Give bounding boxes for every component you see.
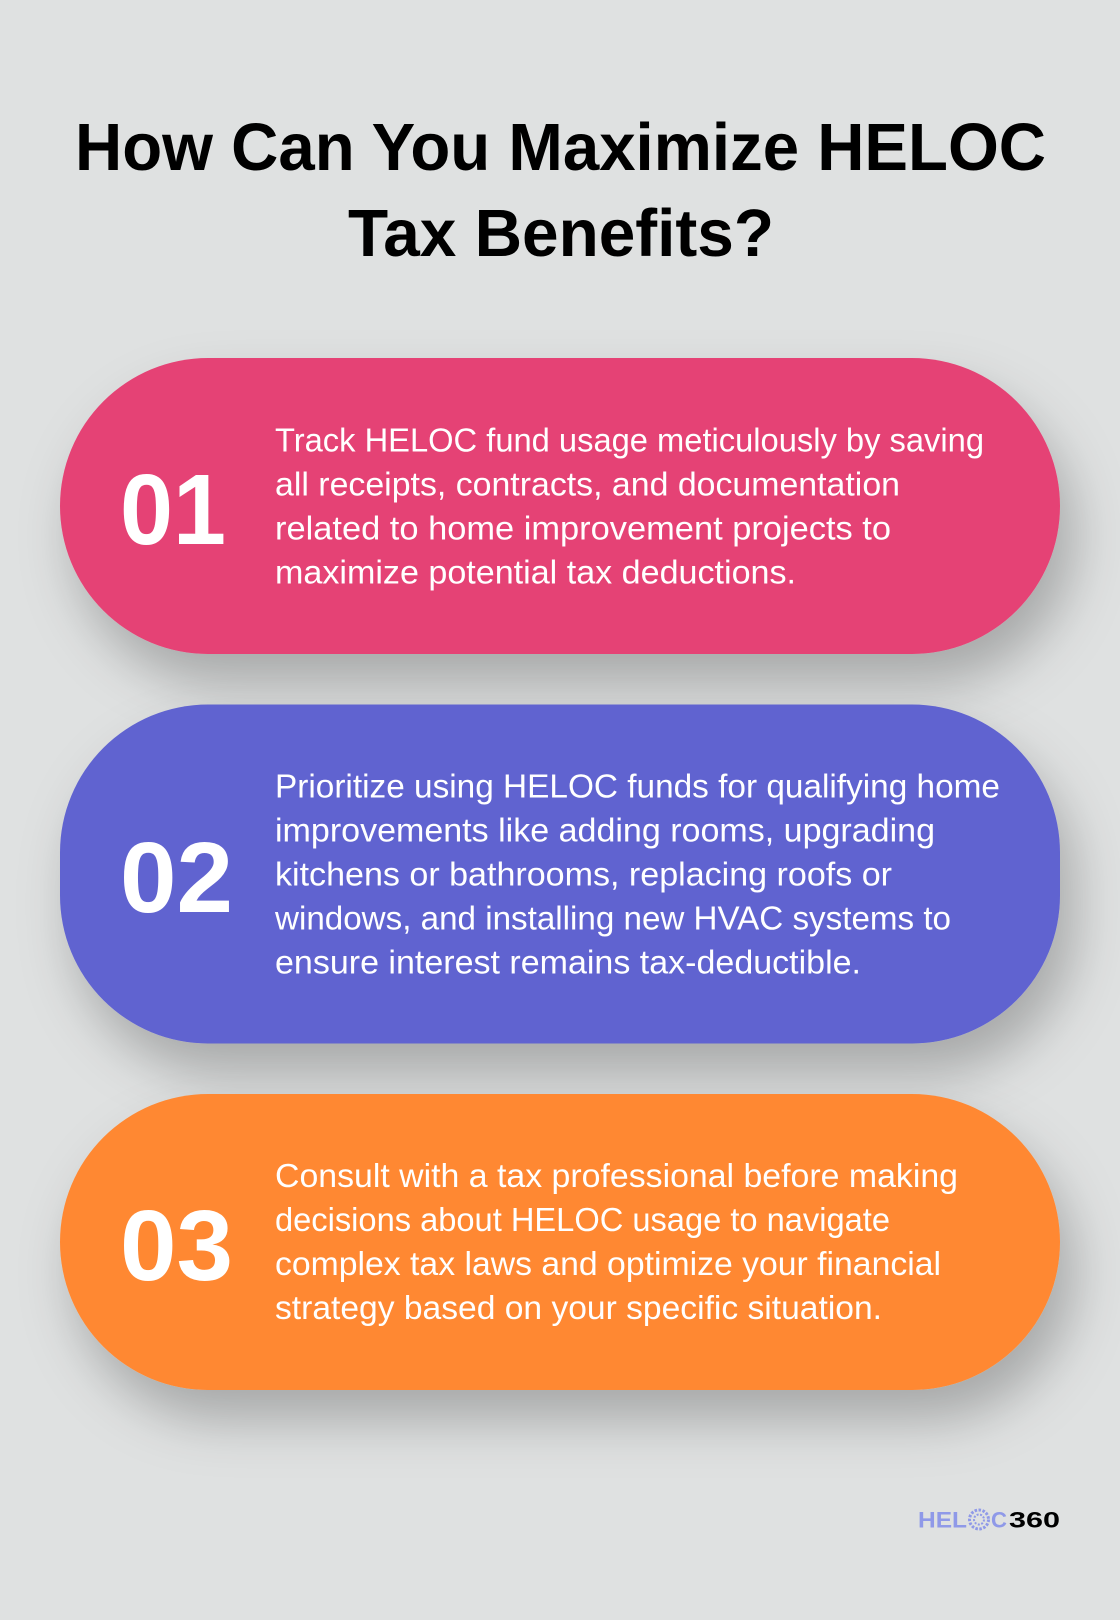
panel: step 01	[60, 358, 1060, 654]
logo: HELOC360: 360	[1009, 1508, 1060, 1532]
title: Tax Benefits?	[348, 196, 774, 271]
text block: step 02: windows, and installing new HVAC systems to	[274, 900, 951, 938]
title	[75, 110, 1046, 271]
text block: step 03: strategy based on your specific situation.	[275, 1290, 882, 1327]
text block: step 01	[275, 422, 984, 592]
panel: step 02	[60, 704, 1060, 1044]
number 01: 01	[120, 454, 226, 566]
text block: step 03	[275, 1158, 958, 1327]
pill background: orange	[60, 1094, 1060, 1390]
text block: step 01: related to home improvement projects to	[275, 510, 891, 548]
text block: step 01: all receipts, contracts, and documentation	[275, 466, 900, 504]
text block: step 02: kitchens or bathrooms, replacing roofs or	[275, 856, 892, 894]
title: How Can You Maximize HELOC	[75, 110, 1046, 185]
logo: HELOC360	[918, 1508, 1060, 1532]
text block: step 03: decisions about HELOC usage to navigate	[275, 1202, 890, 1239]
pill background: pink	[60, 358, 1060, 654]
pill background: blue	[60, 704, 1060, 1044]
number 02: 02	[120, 822, 233, 934]
text block: step 02: ensure interest remains tax-deductible.	[275, 944, 861, 982]
text block: step 02: Prioritize using HELOC funds for qualifying home	[275, 768, 1000, 806]
panel: step 03	[60, 1094, 1060, 1390]
logo: HELOC360: HEL	[918, 1508, 967, 1532]
text block: step 02: improvements like adding rooms, upgrading	[275, 812, 935, 850]
text block: step 02	[274, 768, 1000, 982]
text block: step 01: Track HELOC fund usage meticulously by saving	[275, 422, 984, 460]
icon: swirl O	[970, 1510, 988, 1529]
number 03: 03	[120, 1190, 233, 1302]
text block: step 01: maximize potential tax deductions.	[275, 554, 796, 592]
text block: step 03: complex tax laws and optimize your financial	[275, 1246, 941, 1283]
logo: HELOC360: C	[991, 1508, 1007, 1532]
text block: step 03: Consult with a tax professional before making	[275, 1158, 958, 1195]
